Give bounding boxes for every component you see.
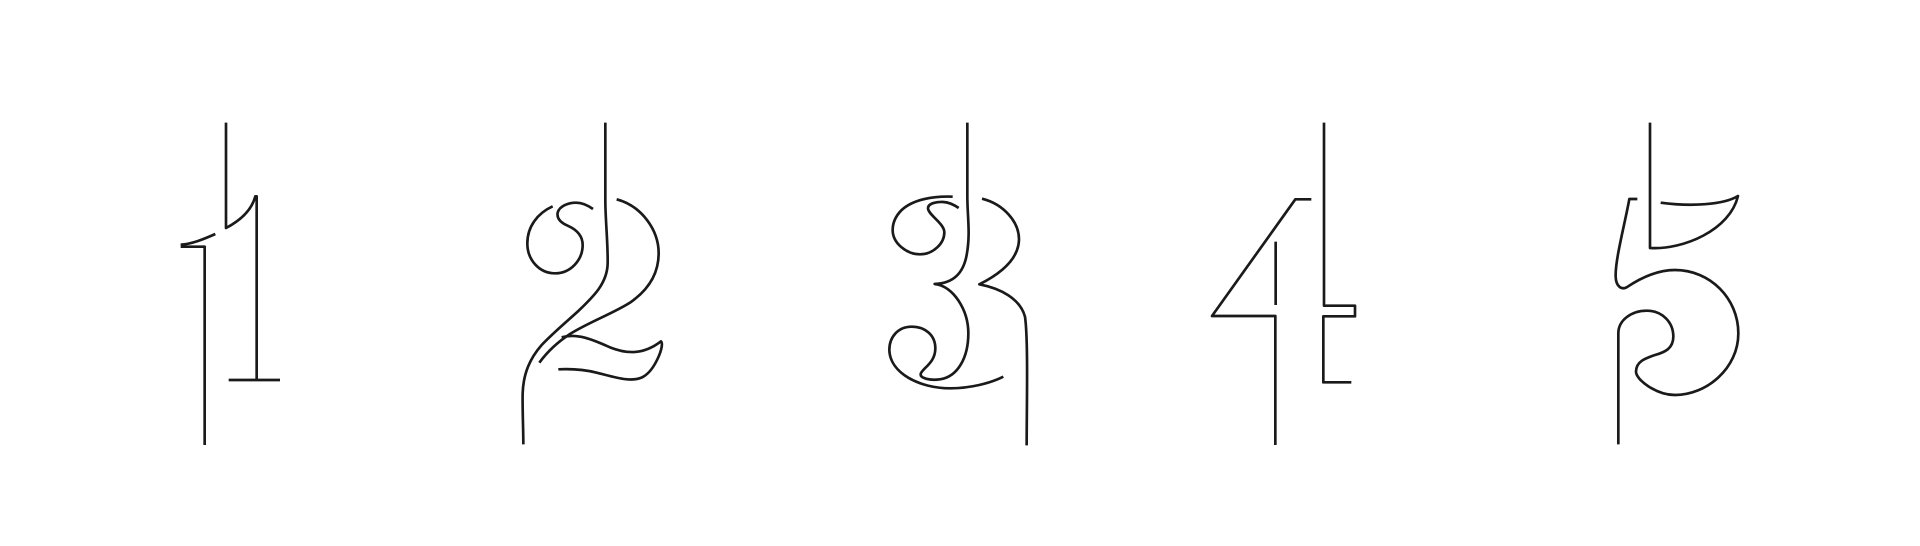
numeral 1 [181, 123, 280, 445]
numeral 4 [1212, 123, 1355, 445]
numeral 2 [523, 123, 662, 444]
numeral 5 [1616, 123, 1738, 444]
numeral 3 [889, 123, 1027, 445]
